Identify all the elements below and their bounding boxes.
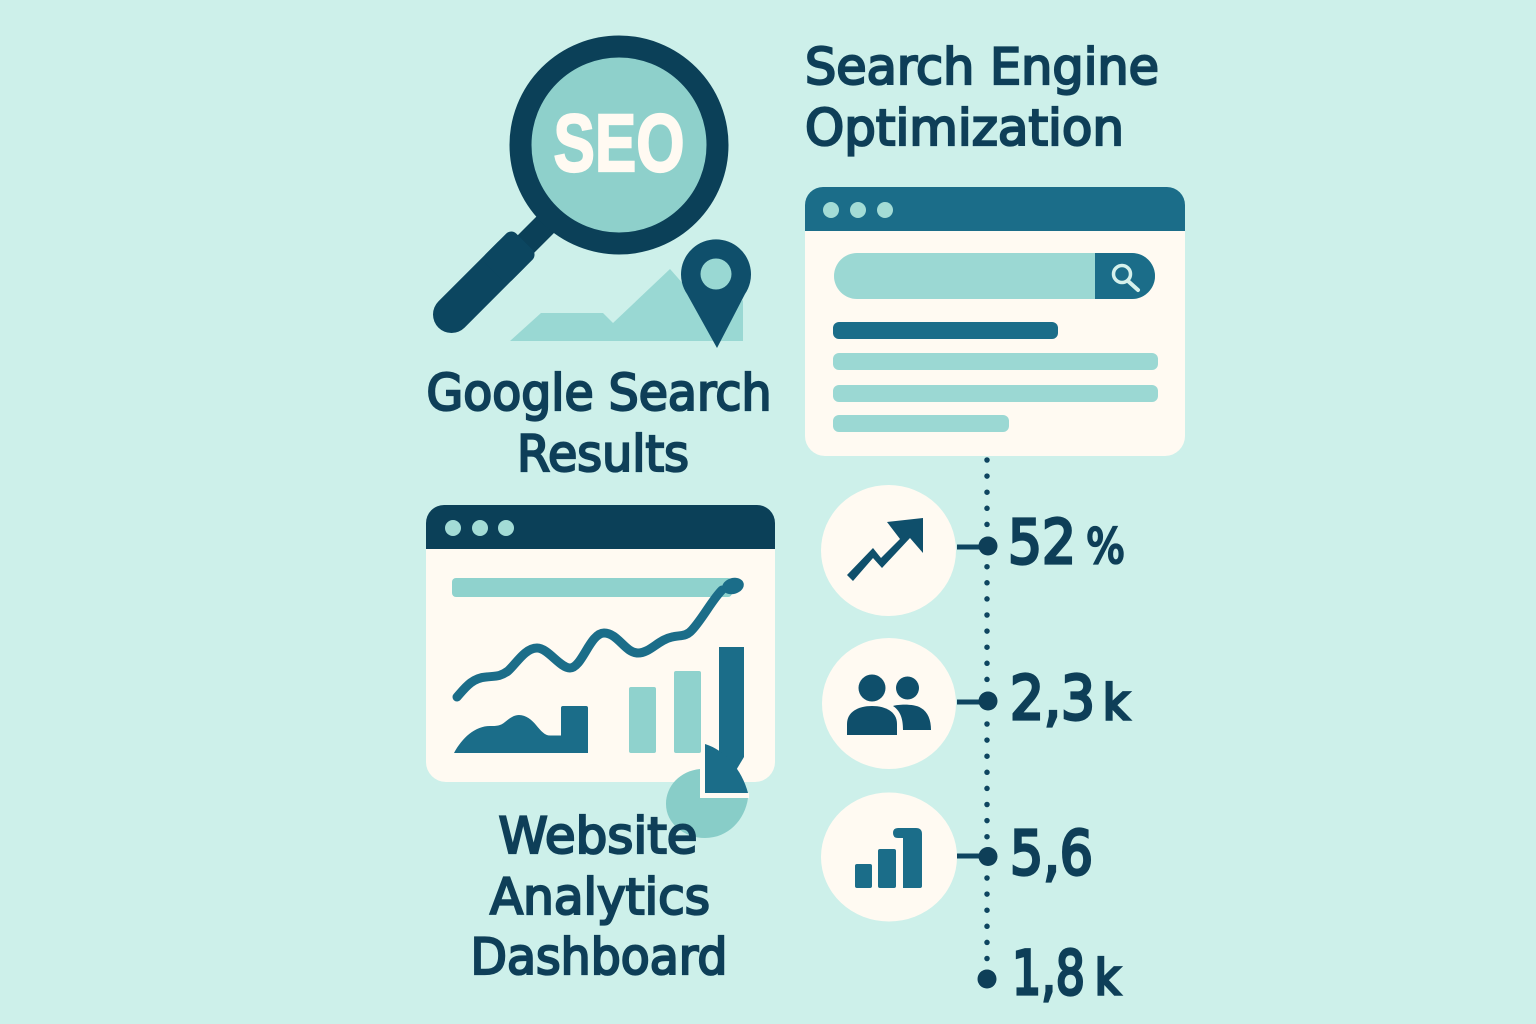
icon: people xyxy=(847,674,931,735)
metric: 5,6 bar score: 5,6 xyxy=(1010,818,1093,889)
heading: Website Analytics Dashboard: Website xyxy=(498,807,698,865)
heading: Search Engine Optimization: Optimization xyxy=(805,99,1124,157)
heading: Google Search Results: Google Search xyxy=(426,364,772,422)
heading: Website Analytics Dashboard: Analytics xyxy=(490,868,710,926)
metric: 52% growth: 52 xyxy=(1008,507,1076,578)
icon: map landscape with location pin xyxy=(510,239,751,348)
timeline: dotted connector xyxy=(984,460,990,962)
icon: SEO magnifying glass: SEO xyxy=(554,98,684,189)
icon: pie chart xyxy=(666,744,749,838)
panel: analytics dashboard browser window xyxy=(426,505,775,782)
heading: Search Engine Optimization: Search Engine xyxy=(805,38,1159,96)
line chart xyxy=(457,575,746,697)
heading: Website Analytics Dashboard: Dashboard xyxy=(470,928,728,986)
bar chart xyxy=(629,647,744,772)
heading: Search Engine Optimization xyxy=(805,38,1159,157)
metric: 2,3k users: 2,3 xyxy=(1010,663,1095,734)
metric: 2,3k users xyxy=(822,638,1129,769)
metric: 1,8k: k xyxy=(1095,950,1120,1006)
icon: trend arrow xyxy=(847,518,923,581)
area chart xyxy=(454,706,588,753)
metric: 2,3k users: k xyxy=(1103,675,1129,731)
icon: SEO magnifying glass xyxy=(425,46,718,341)
heading: Google Search Results xyxy=(426,364,772,483)
heading: Website Analytics Dashboard xyxy=(470,807,728,986)
metric: 1,8k: 1,8 xyxy=(1012,938,1085,1009)
panel: search results browser window xyxy=(805,187,1185,456)
metric: 52% growth: % xyxy=(1086,519,1125,575)
metric: 52% growth xyxy=(821,485,1125,616)
metric: 5,6 bar score xyxy=(821,792,1093,922)
heading: Google Search Results: Results xyxy=(517,425,689,483)
icon: bars xyxy=(855,828,922,888)
metric: 1,8k xyxy=(978,938,1120,1009)
search bar xyxy=(834,253,1155,299)
